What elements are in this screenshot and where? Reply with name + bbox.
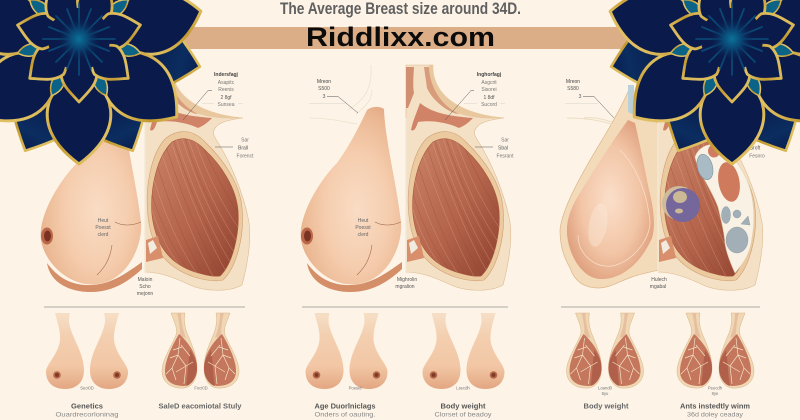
small red cell: [708, 144, 720, 158]
callout labels: middle section: 1 8df: [483, 95, 495, 101]
callout labels: middle section: Fesrant: [497, 154, 514, 160]
small tissue pair: study: [162, 313, 239, 388]
title: The Average Breast size around 34D.: [280, 0, 521, 18]
callout labels: middle section: Asgcrit: [481, 80, 497, 86]
callout labels: left section: Brall: [238, 146, 248, 152]
tiny pair labels: 8ye: [712, 391, 719, 396]
small tissue pair: instantly: [677, 313, 754, 388]
callout labels: left section: [95, 72, 254, 297]
callout labels: left section: Heut: [98, 218, 109, 224]
callout labels: left section: Maloin: [138, 277, 153, 283]
panel: right breast: [560, 85, 659, 288]
tiny pair labels: 8yu: [602, 391, 609, 396]
site name: Riddlixx.com: [306, 22, 495, 52]
callout labels: left section: Indersfagj: [214, 72, 239, 78]
panel: right muscle section with lesions: [658, 65, 763, 290]
callout labels: middle section: Sar: [501, 138, 509, 144]
callout labels: left section: Asapitc: [218, 80, 235, 86]
grey-blue cell: [694, 153, 716, 181]
callout labels: right section: Mreon: [566, 79, 580, 85]
divider left: [44, 306, 245, 308]
callout labels: left section: Sunsea: [218, 102, 235, 108]
captions: Body weight: [440, 402, 486, 410]
captions: SaleD eacomiotal Stuly: [158, 402, 242, 410]
callout labels: middle section: Inghorfagj: [477, 72, 502, 78]
callout labels: middle section: mgralion: [395, 284, 415, 290]
callout labels: middle section: Heut: [358, 218, 369, 224]
callout labels: left section: clerd: [98, 232, 109, 238]
divider right: [561, 306, 760, 308]
callout labels: middle section: 3: [323, 94, 326, 100]
title band: [150, 27, 630, 49]
callout labels: left section: Scho: [139, 284, 151, 290]
tiny pair labels: Lsecdh: [456, 386, 470, 390]
icon: left gold and navy flower: [0, 0, 208, 164]
panel: middle muscle section: [406, 65, 511, 290]
panel: middle breast: [301, 65, 402, 292]
callout labels: left section: Sar: [241, 138, 249, 144]
red oval cell: [715, 160, 743, 204]
callout labels: middle section: Mighrolin: [397, 277, 417, 283]
tiny pair labels: Peecdh: [708, 386, 723, 390]
captions: Onders of oauting.: [314, 412, 376, 418]
callout labels: middle section: Sucord: [481, 102, 497, 108]
divider middle: [302, 306, 508, 308]
callout labels: middle section: clerd: [358, 232, 369, 238]
small breast pair: genetics: [46, 313, 128, 389]
callout labels: right section: [565, 79, 765, 290]
callout labels: left section: Reenis: [218, 87, 234, 93]
small tissue pair: body weight: [566, 313, 644, 388]
callout labels: right section: 3: [579, 94, 582, 100]
tissue pouch: [695, 145, 754, 273]
callout labels: left section: Poesst: [95, 225, 111, 231]
callout labels: middle section: [309, 72, 514, 290]
captions: Age Duorlniclags: [314, 402, 376, 410]
grey cells: [722, 206, 750, 253]
captions: Ants instedtly winm: [680, 402, 750, 410]
captions: 36d doley ceaday: [687, 412, 744, 418]
small breast pair: age: [306, 313, 388, 389]
callout labels: middle section: Sbal: [498, 146, 508, 152]
icon: right gold and navy flower: [603, 0, 800, 164]
callout labels: right section: Hulech: [651, 277, 667, 283]
captions: [56, 402, 750, 418]
purple lesion: [662, 186, 700, 222]
callout labels: right section: Sar: [753, 138, 761, 144]
callout labels: right section: Fesnro: [749, 154, 765, 160]
callout labels: right section: S580: [567, 86, 579, 92]
panel: left muscle section: [145, 65, 250, 290]
callout labels: middle section: Sisorei: [481, 87, 497, 93]
panel: left breast: [41, 107, 142, 292]
captions: Body weight: [584, 402, 629, 410]
tiny pair labels: [80, 386, 723, 396]
captions: Ouardrecorloninag: [56, 412, 119, 418]
captions: Clorset of beadoy: [434, 412, 492, 418]
tiny pair labels: Loand0: [598, 386, 613, 390]
callout labels: middle section: S500: [318, 86, 330, 92]
tiny pair labels: Seci0D: [80, 386, 94, 390]
callout labels: middle section: Mreon: [317, 79, 331, 85]
callout labels: right section: Sroft: [750, 146, 761, 152]
captions: Genetics: [71, 402, 103, 410]
callout labels: middle section: Poesst: [355, 225, 371, 231]
tiny pair labels: Foci0D: [194, 386, 208, 390]
small breast pair: body weight: [422, 313, 504, 389]
callout labels: left section: 2 8gf: [220, 95, 232, 101]
callout labels: left section: mejonn: [137, 291, 153, 297]
tiny pair labels: Poesid: [349, 386, 362, 390]
callout labels: right section: mgabal: [650, 284, 666, 290]
callout labels: left section: Forenct: [237, 154, 254, 160]
